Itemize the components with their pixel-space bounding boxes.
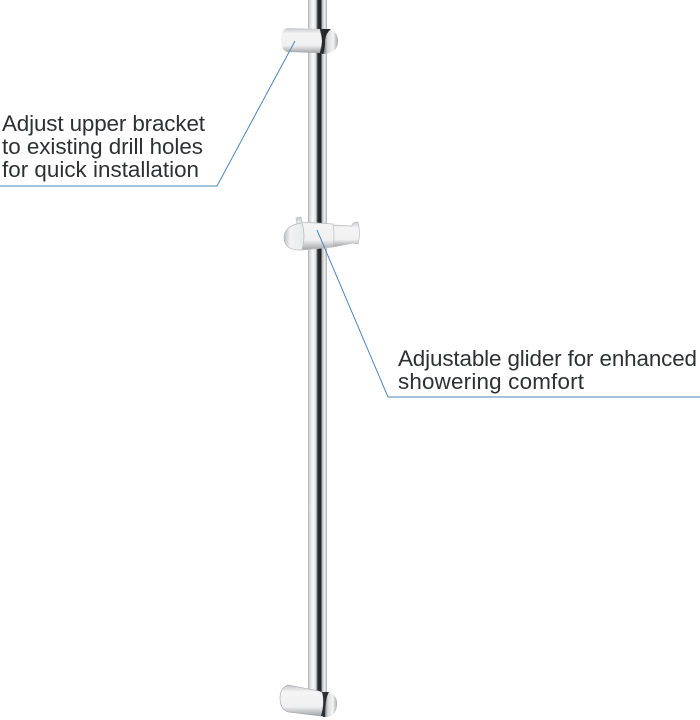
text: glider note: showering comfort bbox=[398, 369, 585, 394]
leader line: upper bracket bbox=[0, 41, 295, 186]
upper bracket bbox=[281, 28, 338, 54]
leader line: glider bbox=[317, 230, 700, 397]
adjustable glider bbox=[284, 217, 360, 250]
text: glider note bbox=[398, 346, 697, 394]
text: glider note: Adjustable glider for enhanced bbox=[398, 346, 697, 371]
lower bracket bbox=[280, 685, 337, 717]
shower rail rod bbox=[308, 0, 327, 695]
callout: upper bracket bbox=[0, 41, 295, 186]
text: upper bracket note: Adjust upper bracket bbox=[2, 111, 206, 136]
text: upper bracket note bbox=[2, 111, 206, 182]
callout: glider bbox=[317, 230, 700, 397]
text: upper bracket note: to existing drill holes bbox=[2, 134, 203, 159]
text: upper bracket note: for quick installation bbox=[2, 157, 199, 182]
